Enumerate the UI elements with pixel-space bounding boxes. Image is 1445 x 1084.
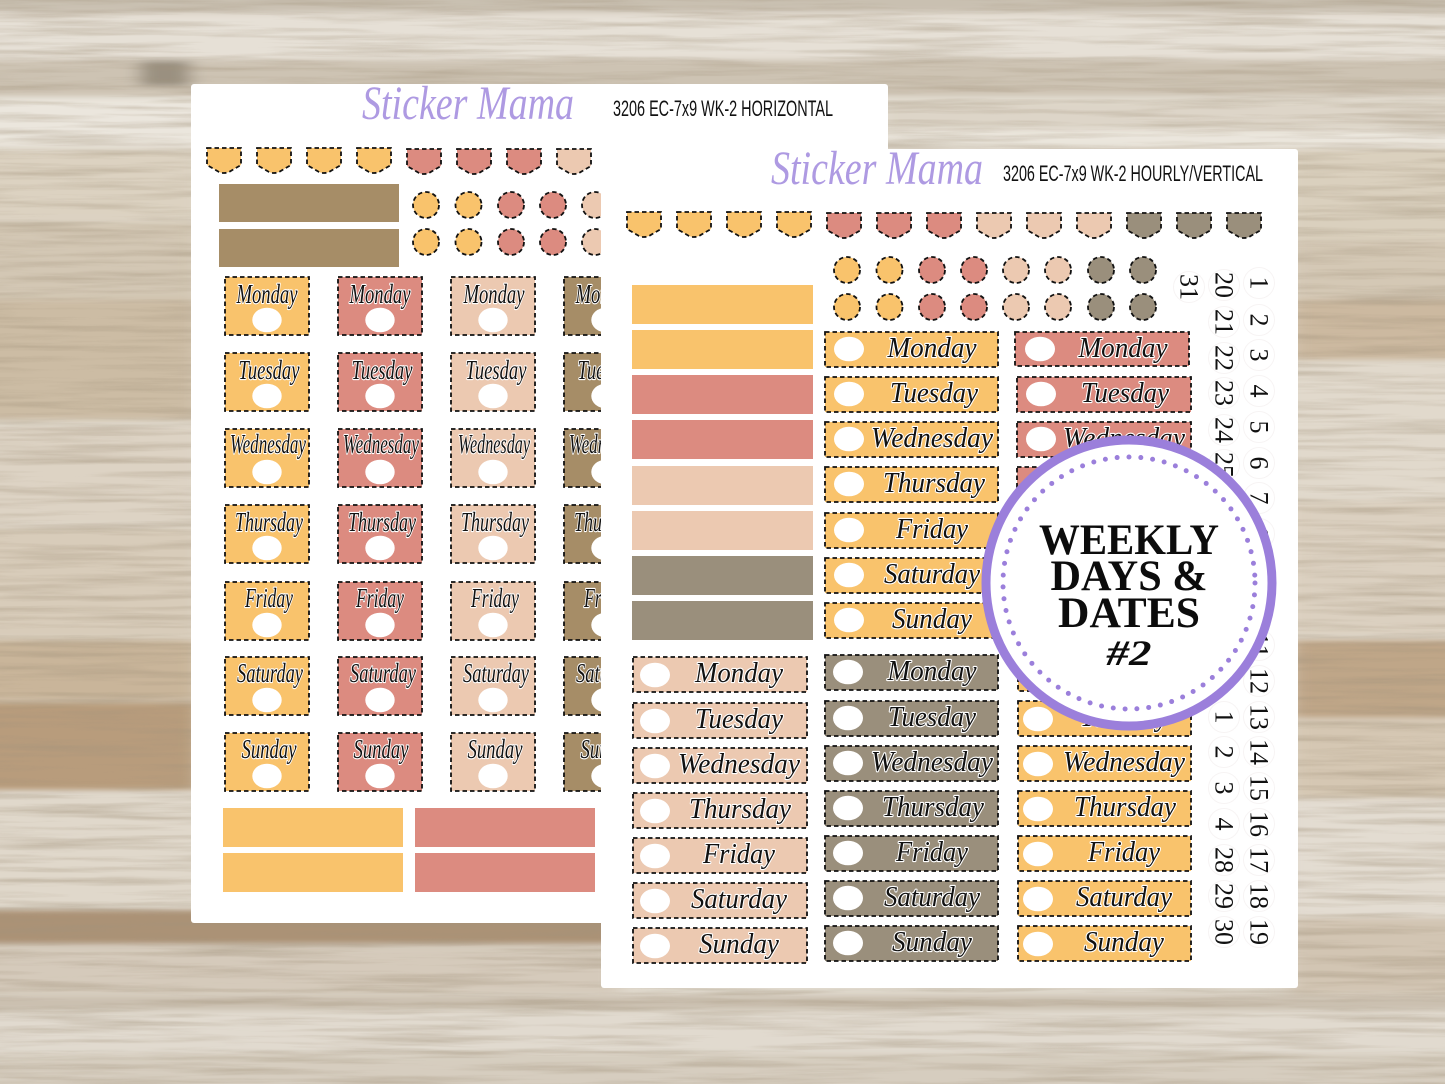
rotated date stickers: right column	[1244, 268, 1274, 948]
day cards: khaki column	[564, 277, 648, 791]
day strips: yellow upper column: Wednesday	[871, 422, 993, 454]
day strips: taupe column: Monday	[887, 655, 977, 687]
day cards: peach column: Sunday	[468, 734, 523, 764]
rotated date stickers: right column: 18	[1244, 883, 1274, 909]
day cards: yellow column: Saturday	[237, 658, 303, 688]
day strips: taupe column: Thursday	[882, 791, 984, 823]
bottom colour bars	[223, 808, 595, 892]
sheet code: horizontal: 3206 EC-7x9 WK-2 HORIZONTAL	[613, 96, 833, 121]
dot stickers	[413, 192, 608, 255]
day strips: taupe column: Wednesday	[871, 746, 993, 778]
day strips: yellow upper column: Tuesday	[890, 377, 978, 409]
rotated date stickers: right column: 16	[1244, 811, 1274, 837]
rotated date stickers: middle column: 4	[1210, 818, 1238, 830]
brand logo: horizontal sheet: Sticker Mama	[362, 77, 574, 130]
day strips: rose column: Tuesday	[1081, 377, 1169, 409]
day cards: khaki column: Thursday	[574, 507, 642, 537]
day strips: yellow lower column: Thursday	[1074, 791, 1176, 823]
day cards: khaki column: Monday	[575, 279, 637, 309]
rotated date stickers: middle column: 1	[1210, 710, 1238, 724]
day cards: yellow column: Tuesday	[238, 355, 300, 385]
day strips: yellow lower column	[1018, 656, 1191, 961]
rotated date stickers: right column: 1	[1244, 276, 1274, 290]
day strips: yellow lower column: Tuesday	[1080, 701, 1168, 733]
badge heading	[1039, 517, 1219, 673]
day cards: peach column	[451, 277, 535, 791]
day cards: rose column: Friday	[355, 583, 404, 613]
rotated date sticker: 31: 31	[1174, 274, 1204, 300]
rotated date stickers: right column: 2	[1244, 314, 1274, 326]
day strips: yellow upper column: Monday	[887, 332, 977, 364]
day cards: yellow column: Wednesday	[230, 429, 306, 459]
day cards: khaki column: Sunday	[580, 734, 636, 764]
rotated date stickers: right column: 4	[1244, 384, 1274, 398]
rotated date stickers: middle column: 22	[1210, 345, 1238, 371]
day cards: peach column: Tuesday	[466, 355, 527, 385]
day strips: peach column: Thursday	[689, 793, 791, 825]
badge heading: DAYS &	[1050, 553, 1208, 600]
day cards: peach column: Monday	[463, 279, 525, 309]
day strips: peach column: Monday	[694, 657, 783, 689]
day strips: peach column: Friday	[702, 838, 775, 870]
day strips: yellow lower column: Wednesday	[1063, 746, 1185, 778]
day strips: rose column	[1015, 332, 1191, 502]
day cards: yellow column: Thursday	[235, 507, 303, 537]
day strips: peach column	[633, 657, 807, 963]
day cards: rose column: Wednesday	[343, 429, 419, 459]
dot stickers	[834, 257, 1156, 320]
badge: weekly days and dates	[986, 440, 1272, 726]
stacked colour bars	[632, 285, 813, 640]
khaki header bars	[219, 184, 399, 267]
day cards: khaki column: Tuesday	[578, 355, 639, 385]
day cards: yellow column	[225, 277, 309, 791]
rotated date stickers: right column: 11	[1244, 632, 1274, 658]
day cards: yellow column: Monday	[236, 279, 298, 309]
day strips: peach column: Sunday	[699, 928, 779, 960]
badge heading: #2	[1105, 633, 1152, 673]
rotated date stickers: right column: 12	[1244, 668, 1274, 694]
rotated date stickers: right column: 7	[1244, 492, 1274, 504]
rotated date stickers: right column: 5	[1244, 420, 1274, 434]
brand logo: vertical sheet: Sticker Mama	[771, 142, 983, 195]
tab stickers row	[207, 148, 591, 174]
day cards: khaki column: Wednesday	[569, 429, 645, 459]
rotated date stickers: right column: 15	[1244, 775, 1274, 801]
rotated date stickers: right column: 8	[1244, 528, 1274, 540]
day cards: yellow column: Friday	[244, 583, 293, 613]
day strips: yellow lower column: Saturday	[1076, 881, 1172, 913]
rotated date stickers: middle column: 21	[1210, 309, 1238, 335]
panel: hourly/vertical sticker sheet	[601, 142, 1298, 988]
day strips: taupe column	[825, 655, 998, 961]
day strips: taupe column: Friday	[895, 836, 968, 868]
day cards: rose column: Thursday	[348, 507, 416, 537]
day cards: peach column: Wednesday	[458, 429, 530, 459]
sheet code: hourly/vertical: 3206 EC-7x9 WK-2 HOURLY/VERTICAL	[1003, 161, 1263, 186]
day cards: rose column	[338, 277, 422, 791]
day strips: rose column: Thursday	[1075, 467, 1177, 499]
day strips: taupe column: Tuesday	[888, 701, 976, 733]
day cards: peach column: Thursday	[461, 507, 529, 537]
rotated date stickers: middle column	[1208, 270, 1240, 948]
day strips: peach column: Wednesday	[678, 748, 800, 780]
day cards: rose column: Tuesday	[352, 355, 413, 385]
rotated date stickers: right column: 3	[1244, 348, 1274, 362]
badge heading: DATES	[1058, 590, 1200, 637]
day cards: khaki column: Saturday	[576, 658, 642, 688]
day strips: yellow upper column	[825, 332, 998, 638]
day strips: yellow upper column: Thursday	[883, 467, 985, 499]
day strips: yellow upper column: Saturday	[884, 558, 980, 590]
day strips: peach column: Tuesday	[695, 703, 783, 735]
day strips: rose column: Monday	[1078, 332, 1168, 364]
tab stickers row	[627, 212, 1261, 238]
day strips: yellow lower column: Sunday	[1084, 926, 1164, 958]
rotated date stickers: right column: 19	[1244, 919, 1274, 945]
day cards: rose column: Sunday	[354, 734, 409, 764]
rotated date stickers: middle column: 28	[1210, 847, 1238, 873]
day strips: taupe column: Sunday	[892, 926, 972, 958]
day strips: peach column: Saturday	[691, 883, 787, 915]
rotated date stickers: middle column: 3	[1210, 782, 1238, 794]
day strips: yellow upper column: Friday	[895, 513, 968, 545]
rotated date stickers: middle column: 25	[1210, 452, 1238, 478]
day cards: rose column: Monday	[349, 279, 411, 309]
badge heading: WEEKLY	[1039, 517, 1219, 564]
rotated date stickers: right column: 6	[1244, 456, 1274, 470]
rotated date stickers: middle column: 23	[1210, 380, 1238, 406]
day strips: yellow upper column: Sunday	[892, 603, 972, 635]
day cards: rose column: Saturday	[350, 658, 416, 688]
rotated date stickers: middle column: 30	[1210, 919, 1238, 945]
day strips: yellow lower column: Friday	[1087, 836, 1160, 868]
rotated date stickers: middle column: 2	[1210, 746, 1238, 758]
rotated date stickers: right column: 9	[1244, 564, 1274, 576]
day cards: peach column: Saturday	[463, 658, 529, 688]
panel: horizontal sticker sheet	[191, 77, 888, 923]
day strips: yellow lower column: Monday	[1079, 656, 1169, 688]
rotated date stickers: right column: 17	[1244, 847, 1274, 873]
day cards: khaki column: Friday	[583, 583, 632, 613]
day strips: taupe column: Saturday	[884, 881, 980, 913]
rotated date stickers: right column: 10	[1244, 593, 1274, 619]
day cards: yellow column: Sunday	[242, 734, 297, 764]
rotated date stickers: right column: 14	[1244, 739, 1274, 765]
rotated date stickers: right column: 13	[1244, 704, 1274, 730]
day strips: rose column: Wednesday	[1063, 422, 1185, 454]
rotated date stickers: middle column: 20	[1210, 272, 1238, 298]
day cards: peach column: Friday	[470, 583, 519, 613]
rotated date stickers: middle column: 24	[1210, 417, 1238, 443]
rotated date stickers: middle column: 29	[1210, 883, 1238, 909]
